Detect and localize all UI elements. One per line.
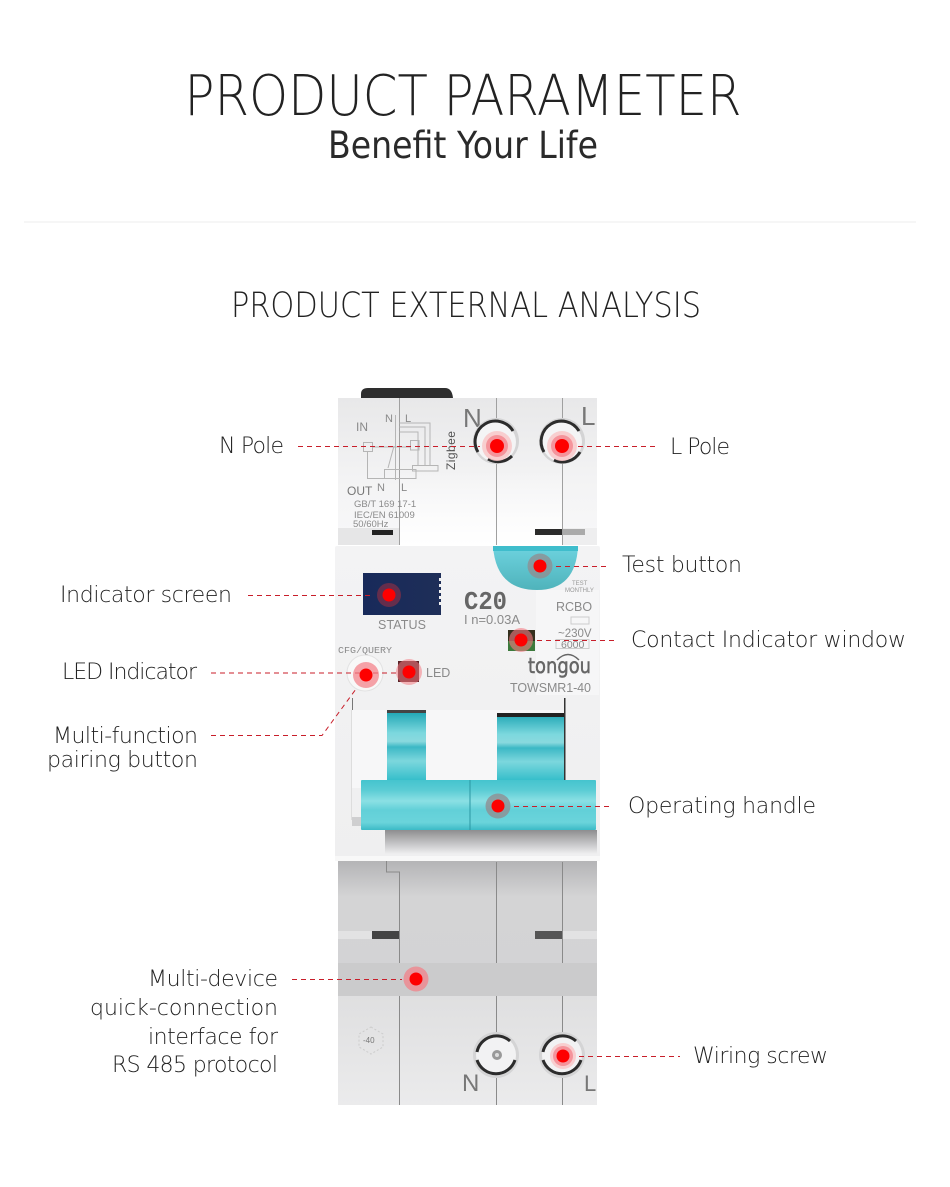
temperature mark (359, 1027, 383, 1054)
rating block (556, 600, 592, 651)
callout: Multi-device interface: quick-connection (90, 996, 278, 1021)
test button (493, 546, 578, 590)
temperature mark: -40 (363, 1036, 375, 1045)
test label: TEST (572, 581, 588, 587)
status label: STATUS (378, 618, 426, 632)
callout: Multi-function pairing button (47, 689, 356, 773)
status screen (363, 573, 441, 615)
rating block: ~230V (558, 628, 592, 640)
handle shadow (385, 830, 597, 854)
diagram labels: IEC/EN 61009 (354, 510, 415, 521)
diagram labels: N (385, 413, 393, 425)
callout: Multi-function pairing button: Multi-function (53, 724, 198, 749)
callout: LED Indicator: LED Indicator (62, 660, 198, 685)
cover step and handle slots (351, 698, 566, 826)
callout: Contact Indicator window (509, 628, 906, 653)
diagram labels: IN (356, 420, 368, 434)
subtitle: Benefit Your Life (328, 124, 598, 167)
led label: LED (426, 666, 450, 680)
terminal letters top (463, 401, 595, 433)
rating panel (536, 590, 599, 695)
upper housing (338, 398, 597, 545)
callout: LED Indicator (62, 659, 422, 688)
diagram labels: OUT (347, 484, 373, 498)
model text (464, 587, 520, 627)
callout: L Pole: L Pole (670, 435, 730, 460)
rating block: 6000 (561, 639, 585, 651)
callout: Contact Indicator window: Contact Indicator window (631, 628, 906, 653)
callout: Wiring screw (550, 1043, 828, 1069)
model text: C20 (464, 587, 507, 617)
diagram labels: 50/60Hz (353, 519, 389, 530)
led (398, 661, 419, 682)
terminal letters top: L (581, 401, 595, 431)
title: PRODUCT PARAMETER (184, 64, 742, 129)
terminal letters top: N (463, 403, 482, 433)
rating block: RCBO (556, 600, 592, 614)
callout: Test button (528, 553, 742, 578)
middle housing (335, 546, 600, 860)
breaker device illustration (335, 388, 600, 1105)
brand logo: tongou (528, 654, 591, 678)
cfg label: CFG/QUERY (338, 645, 392, 656)
terminal letters bottom: L (584, 1071, 596, 1096)
terminal letters bottom: N (462, 1070, 479, 1097)
lower housing (338, 861, 597, 963)
callout: Indicator screen (60, 583, 401, 608)
diagram labels: L (405, 413, 411, 425)
section heading: PRODUCT EXTERNAL ANALYSIS (231, 286, 701, 326)
callout: Indicator screen: Indicator screen (60, 583, 232, 608)
callout: Operating handle: Operating handle (628, 794, 816, 819)
callout: Multi-function pairing button: pairing button (47, 748, 198, 773)
diagram labels: Zigbee (444, 431, 458, 470)
callout: L Pole (547, 431, 730, 461)
test label (565, 581, 594, 594)
rs485 strip (338, 963, 597, 996)
terminal letters bottom (462, 1070, 596, 1097)
callout: Multi-device interface: Multi-device (148, 967, 278, 992)
cfg button (347, 655, 383, 691)
contact window (508, 630, 535, 651)
diagram labels: GB/T 169 17-1 (354, 499, 416, 510)
diagram labels (347, 413, 458, 530)
callout: Multi-device interface (90, 966, 428, 1078)
callout: Test button: Test button (622, 553, 742, 578)
callout: Multi-device interface: RS 485 protocol (112, 1053, 278, 1078)
model number: TOWSMR1-40 (510, 681, 591, 695)
diagram labels: N (377, 482, 385, 494)
top terminals (473, 418, 585, 464)
top clip (361, 388, 453, 398)
test label: MONTHLY (565, 588, 594, 594)
model text: I n=0.03A (464, 612, 520, 627)
callout: Wiring screw: Wiring screw (693, 1044, 828, 1069)
operating handle (361, 780, 596, 830)
callout: Multi-device interface: interface for (148, 1025, 279, 1050)
bottom terminals (473, 1032, 585, 1078)
diagram labels: L (401, 482, 407, 494)
callout: N Pole: N Pole (219, 434, 284, 459)
wiring diagram (364, 415, 438, 480)
callout: Operating handle (486, 794, 816, 819)
callout: N Pole (219, 431, 512, 461)
